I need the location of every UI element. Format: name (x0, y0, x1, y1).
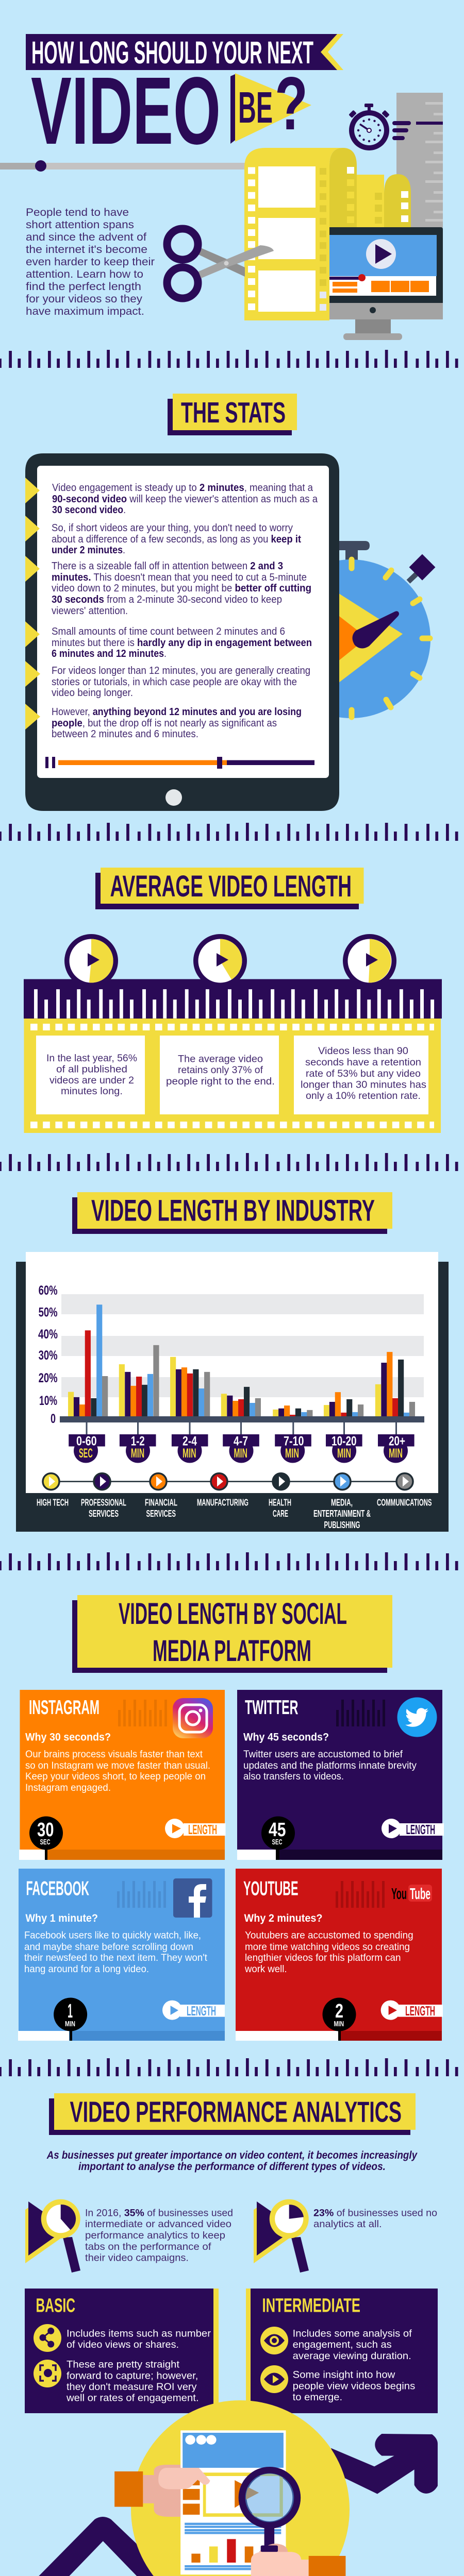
icon: film strip (244, 148, 357, 320)
text: stats paragraphs: Small amounts of time count between 2 minutes and 6 (52, 626, 285, 637)
icon: share (34, 2324, 61, 2352)
panel: instagram: INSTAGRAM (29, 1697, 100, 1719)
legend labels: SERVICES (89, 1509, 119, 1519)
length tag (382, 1819, 444, 1838)
text: stats paragraphs: between 2 minutes and 6 minutes. (52, 728, 198, 740)
legend labels: HIGH TECH (37, 1497, 69, 1507)
intro text: People tend to have (26, 207, 129, 218)
frame: 37 percent: people right to the end. (166, 1076, 275, 1087)
panel: twitter: updates and the platforms innate brevity (243, 1760, 417, 1771)
icon: focus (34, 2360, 61, 2387)
text: stats paragraphs: under 2 minutes. (52, 545, 125, 556)
panel: basic: forward to capture; however, (67, 2370, 198, 2382)
panel: instagram: so on Instagram we move faster than usual. (25, 1760, 210, 1771)
text: stats paragraphs: video down to 2 minutes, but you might be better off cutting (52, 583, 311, 594)
panel: twitter (237, 1690, 444, 1860)
panel: youtube: YOUTUBE (243, 1877, 299, 1900)
chart: 53 percent pie (343, 934, 396, 983)
y axis labels: 10% (39, 1394, 57, 1408)
icon: monitor with play (329, 227, 443, 340)
text: stats paragraphs: minutes but there is hardly any dip in engagement between (52, 637, 312, 649)
stat: 35 percent: performance analytics to keep (85, 2230, 225, 2241)
badge: 30 sec: SEC (40, 1838, 51, 1846)
frame: retention: longer than 30 minutes has (301, 1079, 426, 1090)
heading: video length by social media platform: MEDIA PLATFORM (153, 1634, 311, 1668)
frame: 56 percent: In the last year, 56% (46, 1053, 137, 1064)
illustration: yellow circle and report (114, 2400, 350, 2576)
progress bar (0, 160, 247, 172)
text: stats paragraphs: 90-second video will keep the viewer's attention as much as a (52, 494, 318, 505)
text: stats paragraphs: minutes. This doesn't mean that you need to cut a 5-minute (52, 572, 307, 583)
panel: intermediate: to emerge. (293, 2392, 342, 2403)
stat: 35 percent: intermediate or advanced video (85, 2218, 231, 2230)
label: 7-10 min: MIN (285, 1446, 299, 1461)
y axis labels: 0 (51, 1412, 56, 1426)
icon: stopwatch (349, 104, 409, 150)
chart: 56 percent pie (64, 934, 118, 983)
y axis labels: 40% (38, 1327, 58, 1342)
legend labels: MEDIA, (331, 1497, 353, 1507)
panel: basic: BASIC (36, 2295, 75, 2317)
x axis stems (86, 1422, 397, 1435)
heading: the stats: THE STATS (181, 396, 286, 429)
label: 0-60 sec: 0-60 (76, 1434, 97, 1449)
panel: basic: they don't measure ROI very (67, 2381, 197, 2393)
panel: intermediate: Some insight into how (293, 2369, 395, 2381)
badge: 1 min: 1 (68, 2001, 73, 2022)
legend labels: FINANCIAL (145, 1497, 177, 1507)
text: stats paragraphs: However, anything beyond 12 minutes and you are losing (52, 706, 302, 718)
label: 10-20 min (326, 1434, 362, 1463)
text: stats paragraphs: viewers' attention. (52, 605, 128, 617)
title: video be?: BE (238, 83, 273, 132)
legend labels: ENTERTAINMENT & (313, 1509, 371, 1519)
text: stats paragraphs: There is a sizeable fall off in attention between 2 and 3 (52, 561, 283, 572)
frame: 56 percent: minutes long. (61, 1086, 123, 1097)
y axis labels (38, 1283, 58, 1426)
icon: youtube logo: You (391, 1885, 407, 1903)
legend labels (37, 1497, 432, 1530)
panel: industry chart (16, 1252, 449, 1532)
intro text: and since the advent of (26, 231, 146, 243)
heading: video length by industry (72, 1192, 392, 1234)
label: 7-10 min (275, 1434, 311, 1463)
icon: yellow tab arrows (25, 478, 40, 730)
chart: 37 percent pie (193, 934, 247, 983)
frame: 37 percent: retains only 37% of (178, 1064, 263, 1076)
panel: instagram (19, 1690, 226, 1860)
panel: facebook: FACEBOOK (26, 1877, 89, 1900)
panel: twitter: Twitter users are accustomed to brief (243, 1749, 403, 1760)
intro text (46, 2149, 418, 2173)
heading: video length by social media platform (72, 1595, 392, 1673)
legend labels: PROFESSIONAL (81, 1497, 126, 1507)
text: stats paragraphs: 6 minutes and 12 minutes. (52, 648, 167, 659)
legend labels: MANUFACTURING (197, 1497, 248, 1507)
label: 4-7 min: MIN (234, 1446, 247, 1461)
stat: 35 percent: In 2016, 35% of businesses used (85, 2208, 233, 2219)
text: stats paragraphs: 30 second video. (52, 504, 126, 516)
legend labels: COMMUNICATIONS (377, 1497, 432, 1507)
title banner (26, 34, 343, 70)
text: stats paragraphs (52, 482, 318, 740)
title: video be?: VIDEO (31, 58, 221, 164)
frame: 56 percent (36, 1036, 145, 1114)
label: 4-7 min (223, 1434, 259, 1463)
length tag: LENGTH (187, 2003, 216, 2019)
badge: 2 min (323, 1998, 356, 2031)
frame: retention: rate of 53% but any video (306, 1068, 421, 1079)
frame: retention: Videos less than 90 (318, 1045, 408, 1057)
intro text (26, 207, 155, 317)
panel: facebook: and maybe share before scrolling down (24, 1941, 193, 1953)
label: 2-4 min: 2-4 (183, 1434, 197, 1449)
frame: retention: only a 10% retention rate. (306, 1090, 421, 1101)
label: 20+ min (378, 1434, 415, 1463)
panel: basic: These are pretty straight (67, 2359, 180, 2370)
panel: instagram: Our brains process visuals faster than text (25, 1749, 203, 1760)
panel: facebook: hang around for a long video. (24, 1963, 149, 1975)
legend (43, 1473, 413, 1490)
badge: 45 sec (261, 1817, 295, 1850)
panel: intermediate: average viewing duration. (293, 2350, 411, 2362)
label: 7-10 min: 7-10 (284, 1434, 304, 1449)
panel: instagram: Why 30 seconds? (25, 1732, 111, 1743)
label: 10-20 min: 10-20 (332, 1434, 357, 1449)
panel: facebook: Why 1 minute? (25, 1912, 98, 1924)
intro text: find the perfect length (26, 281, 141, 293)
panel: facebook (18, 1869, 225, 2041)
y axis labels: 50% (39, 1306, 58, 1320)
panel: youtube: Why 2 minutes? (244, 1912, 323, 1924)
frame: 56 percent: of all published (56, 1064, 127, 1075)
legend labels: HEALTH (269, 1497, 291, 1507)
bar chart (68, 1304, 415, 1416)
label: 4-7 min: 4-7 (234, 1434, 248, 1449)
label: 2-4 min (172, 1434, 208, 1463)
legend labels: SERVICES (146, 1509, 176, 1519)
y axis labels: 30% (39, 1348, 58, 1363)
intro text: even harder to keep their (26, 256, 155, 268)
text: stats paragraphs: people, but the drop off is not nearly as significant as (52, 718, 277, 729)
title: video be?: ? (275, 61, 308, 145)
panel: twitter: Why 45 seconds? (243, 1732, 329, 1743)
label: 20+ min: 20+ (389, 1434, 405, 1449)
panel: youtube (236, 1869, 443, 2041)
stat: 35 percent: their video campaigns. (85, 2252, 189, 2264)
heading: video performance analytics (49, 2093, 416, 2135)
panel: twitter: also transfers to videos. (243, 1771, 344, 1782)
label: 0-60 sec (69, 1434, 105, 1463)
stat: 23 percent: analytics at all. (313, 2218, 382, 2230)
badge: 45 sec: 45 (269, 1819, 286, 1841)
intro text: for your videos so they (26, 293, 143, 305)
icon: twitter (397, 1697, 437, 1737)
legend labels: CARE (273, 1509, 288, 1519)
badge: 30 sec (29, 1817, 63, 1850)
panel: basic: of video views or shares. (67, 2339, 179, 2350)
panel: tablet (25, 453, 339, 811)
badge: 45 sec: SEC (272, 1838, 283, 1846)
frame: retention (294, 1036, 428, 1114)
icon: eye with play (260, 2365, 288, 2393)
panel: intermediate: engagement, such as (293, 2339, 392, 2350)
stat: 23 percent: 23% of businesses used no (313, 2208, 437, 2219)
text: stats paragraphs: about a difference of a few seconds, as long as you keep it (52, 534, 301, 545)
text: stats paragraphs: Video engagement is steady up to 2 minutes, meaning that a (52, 482, 313, 494)
y axis labels: 20% (39, 1371, 58, 1385)
label: 10-20 min: MIN (337, 1446, 351, 1461)
length tag: LENGTH (188, 1822, 217, 1837)
label: 1-2 min: 1-2 (131, 1434, 145, 1449)
panel: instagram: Instagram engaged. (25, 1782, 111, 1793)
intro text: important to analyse the performance of different types of videos. (78, 2161, 386, 2173)
text: stats paragraphs: So, if short videos are your thing, you don't need to worry (52, 522, 293, 534)
heading: the stats (168, 394, 297, 435)
panel: intermediate: INTERMEDIATE (262, 2295, 360, 2317)
icon: youtube logo: Tube (410, 1885, 430, 1903)
arrow: rising trend (17, 2434, 438, 2576)
label: 2-4 min: MIN (183, 1446, 196, 1461)
icon: scissors (167, 229, 274, 298)
text: stats paragraphs: For videos longer than 12 minutes, you are generally creating (52, 665, 310, 676)
panel: basic (25, 2289, 219, 2413)
frame: 37 percent (160, 1036, 279, 1114)
text: stats paragraphs: stories or tutorials, in which case people are okay with the (52, 676, 297, 688)
icon: large stopwatch (272, 541, 435, 718)
icon: instagram (173, 1698, 213, 1738)
panel: intermediate: people view videos begins (293, 2381, 416, 2392)
badge: 30 sec: 30 (37, 1819, 54, 1841)
icon: eye (260, 2327, 288, 2354)
label: 1-2 min (120, 1434, 156, 1463)
icon: facebook (173, 1878, 212, 1918)
text: stats paragraphs: 30 seconds from a 2-minute 30-second video to keep (52, 594, 282, 605)
panel: intermediate (246, 2289, 438, 2413)
length tag: LENGTH (405, 2003, 435, 2019)
icon: left hand (114, 2465, 210, 2517)
panel: facebook: Facebook users like to quickly watch, like, (24, 1930, 201, 1941)
intro text: attention. Learn how to (26, 268, 143, 280)
intro text: have maximum impact. (26, 306, 144, 317)
length tag (165, 1819, 226, 1838)
icon: right hand (251, 2544, 345, 2576)
intro text: short attention spans (26, 219, 134, 231)
intro text: As businesses put greater importance on video content, it becomes increasingly (46, 2149, 418, 2161)
frame: retention: seconds have a retention (305, 1057, 421, 1068)
panel: youtube: Youtubers are accustomed to spending (245, 1930, 413, 1941)
length tag (381, 2001, 443, 2020)
panel: film strip stats (24, 934, 442, 1133)
text: stats paragraphs: video being longer. (52, 687, 133, 699)
length tag (162, 2001, 225, 2020)
panel: youtube: more time watching videos so creating (245, 1941, 410, 1953)
stat: 35 percent (25, 2199, 233, 2273)
panel: youtube: lengthier videos for this platform can (245, 1952, 401, 1963)
label: 0-60 sec: SEC (79, 1446, 93, 1461)
frame: 56 percent: videos are under 2 (49, 1075, 134, 1086)
badge: 1 min (54, 1998, 87, 2031)
length tag: LENGTH (406, 1822, 435, 1837)
panel: intermediate: Includes some analysis of (293, 2328, 412, 2340)
badge: 2 min: MIN (334, 2020, 344, 2028)
stat: 23 percent (254, 2199, 437, 2273)
label: 20+ min: MIN (389, 1446, 403, 1461)
stat: 35 percent: tabs on the performance of (85, 2241, 211, 2252)
panel: basic: well or rates of engagement. (66, 2393, 199, 2404)
icon: back film roll (357, 174, 411, 228)
legend labels: PUBLISHING (324, 1520, 360, 1530)
icon: magnifying glass (239, 2467, 301, 2547)
label: 1-2 min: MIN (131, 1446, 144, 1461)
panel: facebook: their newsfeed to the next item. They won't (24, 1952, 208, 1963)
panel: youtube: work well. (244, 1963, 287, 1975)
heading: average video length (95, 868, 364, 909)
badge: 2 min: 2 (335, 2001, 343, 2022)
ruler (396, 93, 443, 228)
frame: 37 percent: The average video (178, 1053, 263, 1064)
panel: instagram: Keep your videos short, to keep people on (25, 1771, 206, 1782)
panel: twitter: TWITTER (245, 1697, 298, 1719)
panel: basic: Includes items such as number (67, 2328, 211, 2340)
intro text: the internet it's become (26, 244, 147, 256)
video controls (45, 757, 314, 769)
y axis labels: 60% (39, 1283, 58, 1298)
badge: 1 min: MIN (65, 2020, 75, 2028)
